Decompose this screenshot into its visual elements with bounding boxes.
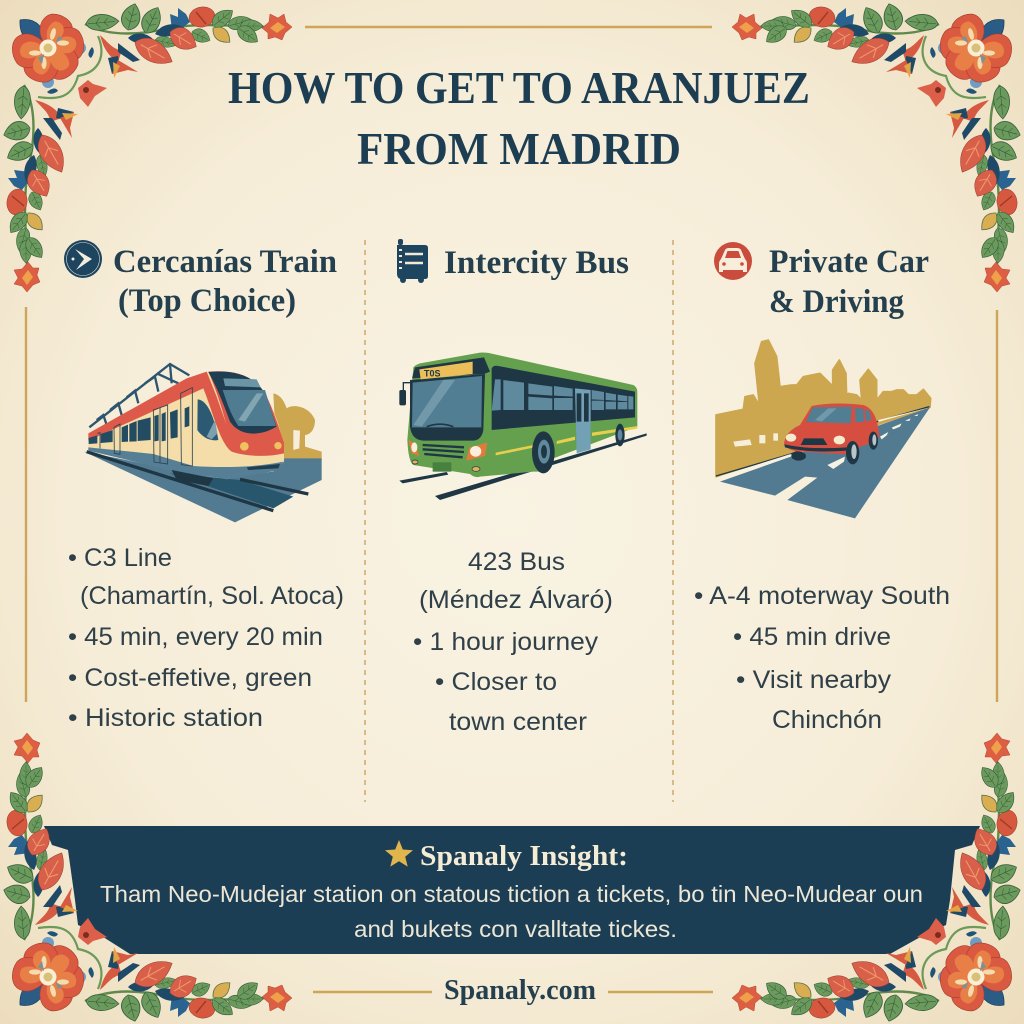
footer website: Spanaly.com [444, 975, 596, 1006]
list: bus: (Méndez Álvaró) [419, 585, 613, 614]
icon: bus [397, 239, 428, 283]
illustration: bus: T0S [424, 369, 440, 379]
floral corner bottom right [732, 733, 1023, 1024]
list: train: • Cost-effetive, green [68, 664, 312, 692]
illustration: train [84, 364, 322, 522]
icon: car badge [714, 242, 752, 280]
title: HOW TO GET TO ARANJUEZ [228, 62, 810, 113]
heading: train [113, 244, 337, 319]
list: bus: • 1 hour journey [413, 628, 599, 656]
list: train: • 45 min, every 20 min [68, 623, 323, 651]
callout text: Tham Neo-Mudejar station on statous tiction a tickets, bo tin Neo-Mudear oun [100, 881, 923, 907]
illustration: car [716, 340, 931, 518]
callout text: and bukets con valltate tickes. [354, 916, 677, 942]
floral corner top left [1, 1, 292, 292]
heading: car: & Driving [769, 284, 904, 320]
title: FROM MADRID [357, 123, 681, 174]
icon: train badge [64, 240, 102, 278]
list: bus [413, 548, 613, 736]
list: car: • 45 min drive [733, 623, 891, 651]
floral corner bottom left [1, 733, 292, 1024]
list: train: (Chamartín, Sol. Atoca) [80, 582, 344, 610]
list: car: • Visit nearby [736, 666, 892, 694]
heading: train: (Top Choice) [118, 283, 296, 319]
title [228, 62, 810, 174]
list: train: • C3 Line [68, 544, 172, 572]
floral corner top right [732, 1, 1023, 292]
list: bus: 423 Bus [468, 548, 565, 576]
panel: intercity bus [397, 239, 647, 736]
panel: Cercanías train [64, 240, 344, 732]
list: bus: town center [449, 708, 587, 736]
heading: bus: Intercity Bus [444, 245, 629, 281]
insight banner background [44, 826, 980, 954]
icon: star [385, 840, 413, 867]
panel: private car [694, 242, 950, 734]
heading: car: Private Car [769, 244, 929, 280]
illustration: bus [399, 352, 647, 500]
callout heading: Spanaly Insight: [420, 840, 628, 872]
list: train [68, 544, 344, 732]
heading: car [769, 244, 929, 320]
list: train: • Historic station [68, 704, 263, 732]
list: car: Chinchón [772, 706, 882, 734]
list: car [694, 582, 950, 734]
list: car: • A-4 moterway South [694, 582, 950, 610]
callout: Spanaly Insight [100, 840, 923, 942]
list: bus: • Closer to [435, 668, 557, 696]
heading: train: Cercanías Train [113, 244, 337, 280]
callout text [100, 881, 923, 942]
